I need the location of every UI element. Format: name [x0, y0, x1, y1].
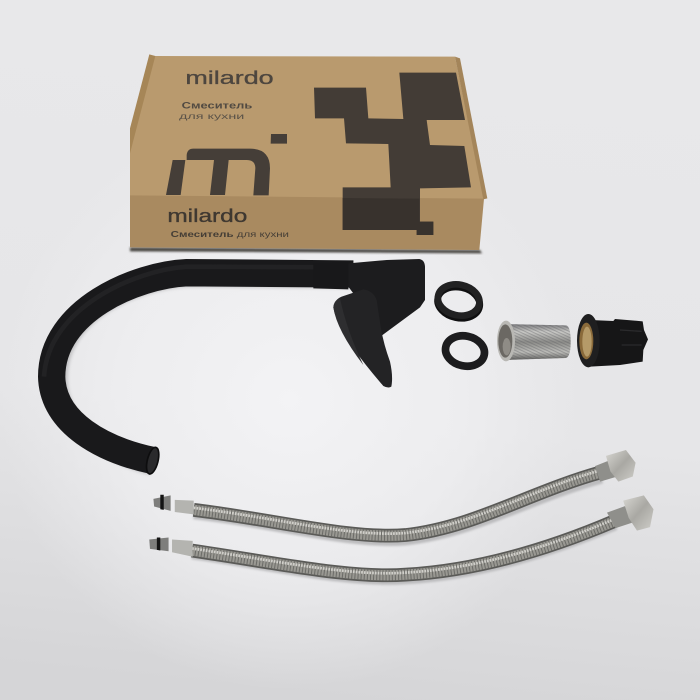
plastic nut [577, 314, 648, 367]
box shadow [130, 247, 482, 253]
top label: Смеситель [182, 101, 253, 111]
top sublabel: для кухни [179, 111, 245, 121]
front pattern darker band [343, 198, 433, 235]
lower hose [149, 495, 653, 580]
ring gasket lower [443, 332, 487, 370]
braided hoses [149, 450, 653, 580]
large m logo [166, 134, 287, 195]
product box [130, 54, 487, 253]
faucet handle [333, 289, 392, 388]
front label: Смеситель для кухни [171, 229, 289, 239]
square dot [271, 134, 287, 144]
faucet body [348, 259, 425, 339]
upper hose [153, 450, 636, 541]
steel sleeve [497, 321, 571, 361]
box right flap [455, 57, 487, 199]
box left flap [130, 54, 155, 153]
logo on top face: milardo [185, 67, 274, 88]
pixel pattern on box [314, 73, 471, 235]
logo on front face: milardo [167, 205, 247, 226]
aerator tip [144, 446, 161, 475]
box front face [130, 195, 484, 250]
faucet spout [44, 267, 353, 475]
box top face [130, 56, 484, 199]
ring gasket upper [435, 281, 483, 322]
parts: faucet body, rings, sleeve, nut [313, 259, 648, 388]
